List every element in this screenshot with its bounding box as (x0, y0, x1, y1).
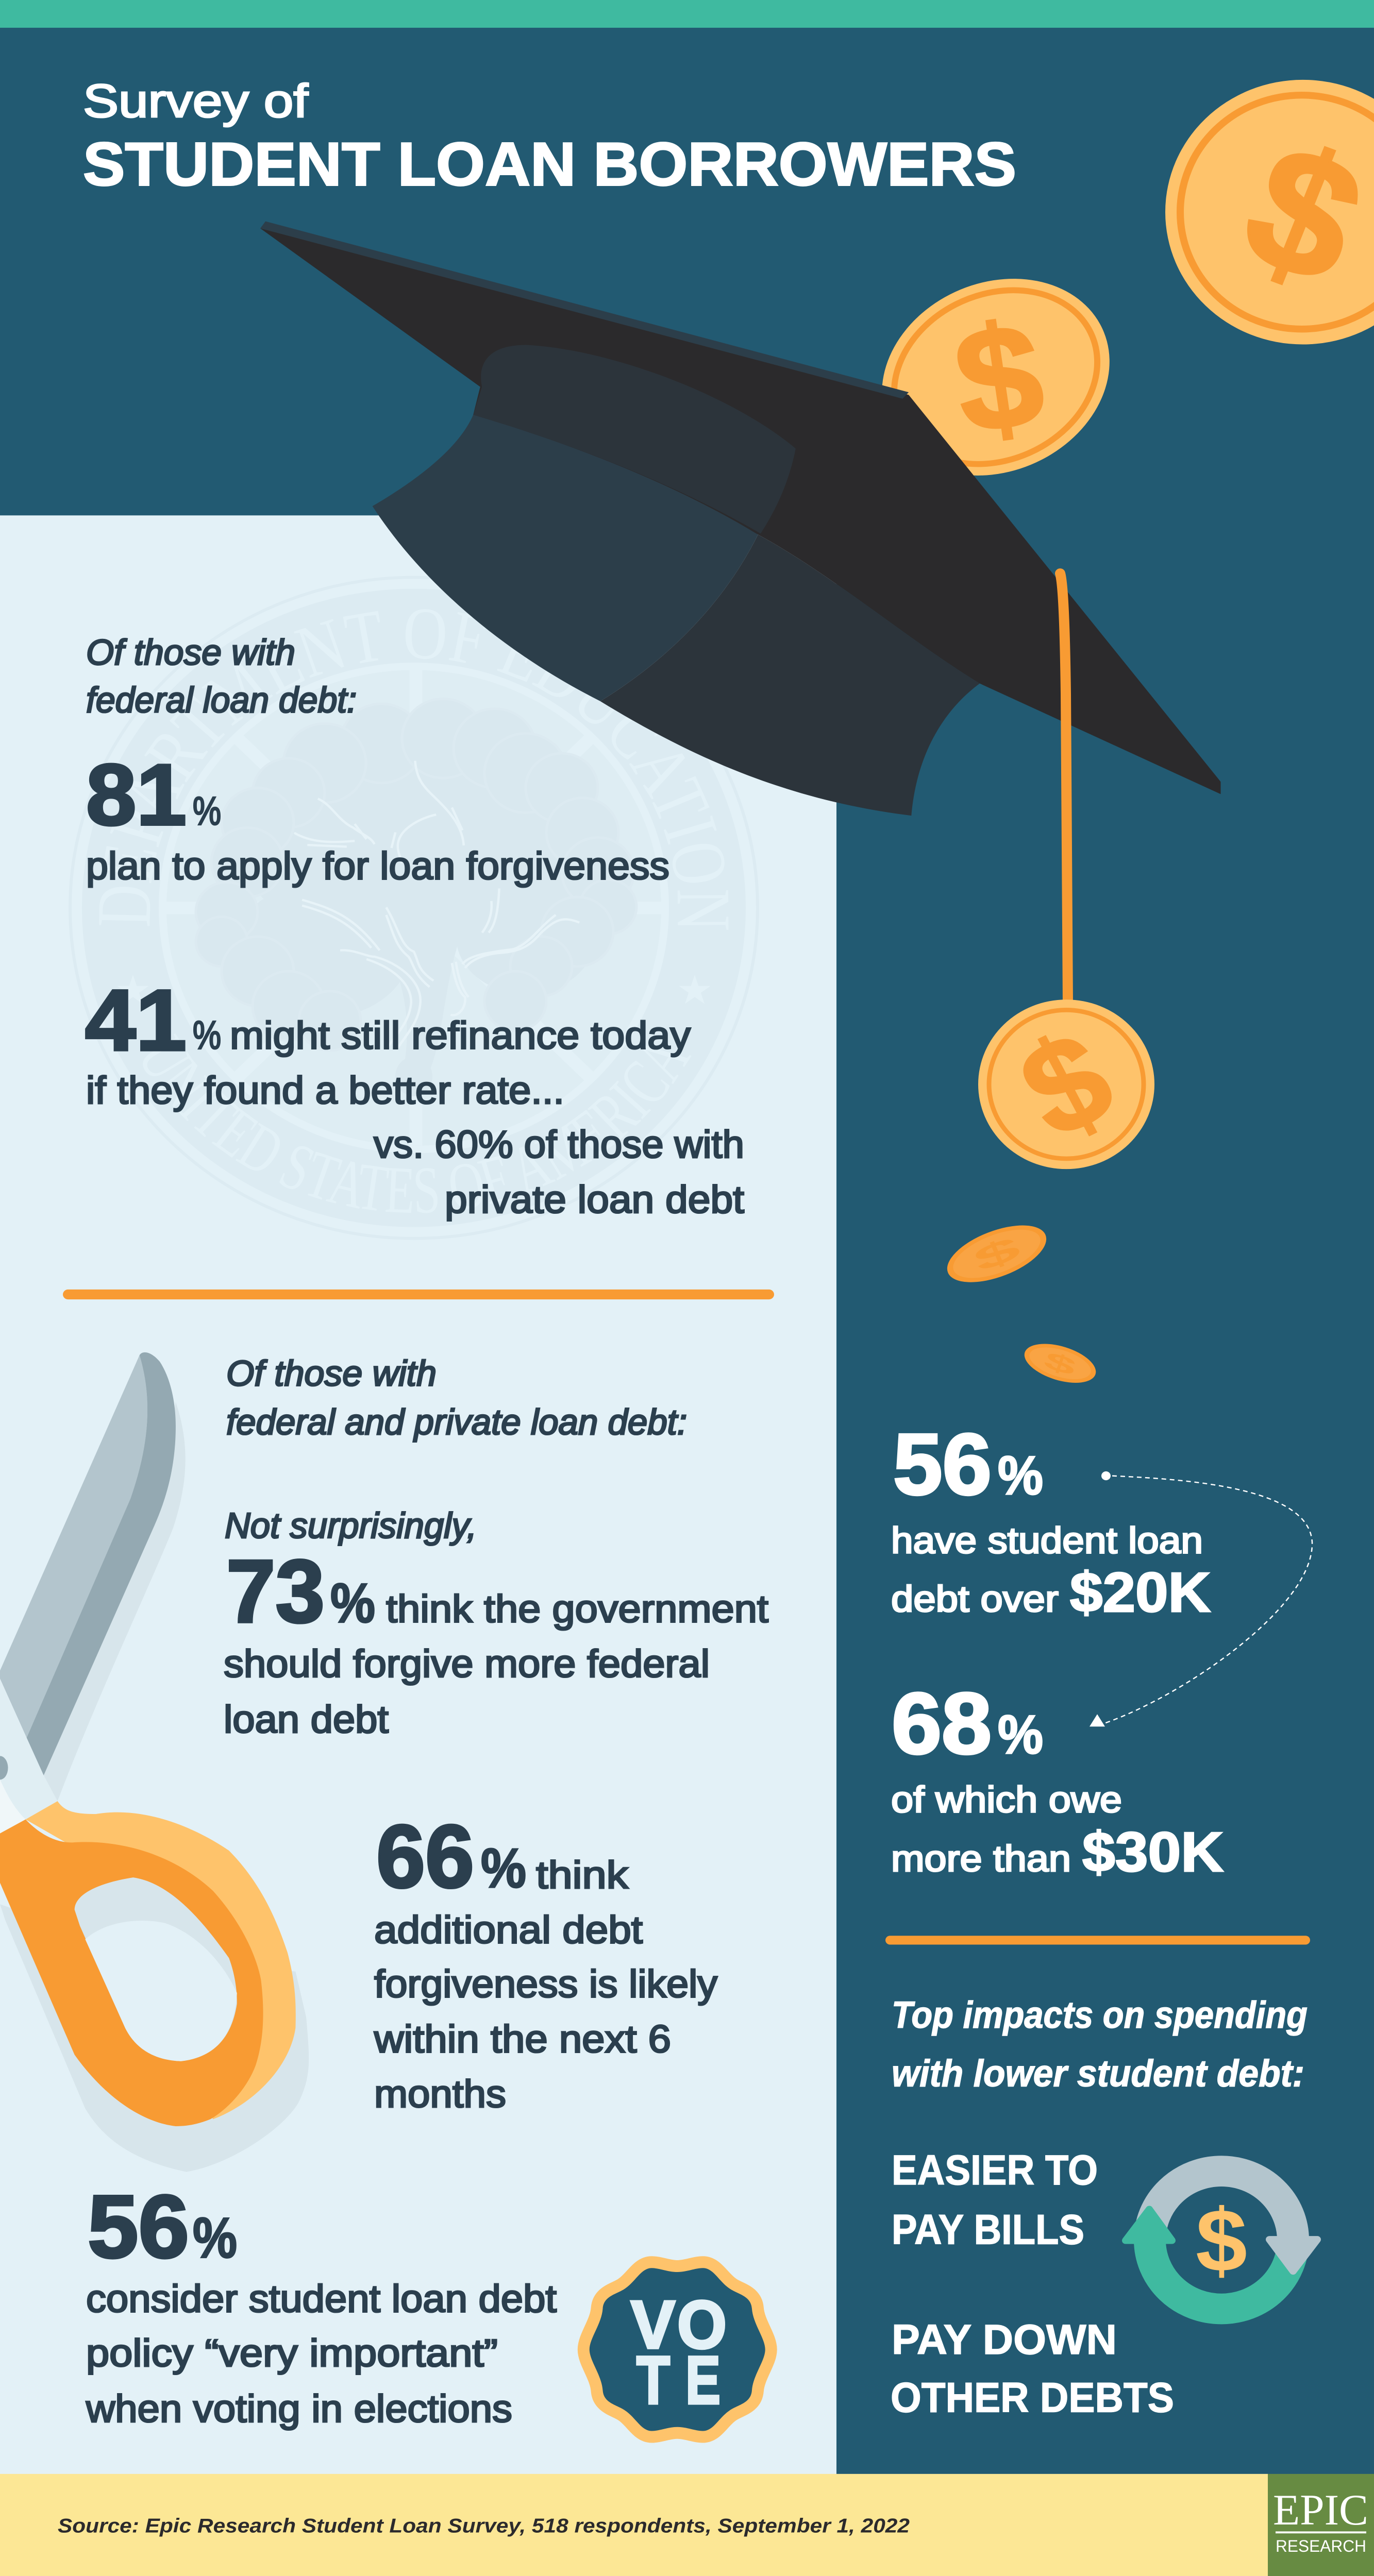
text block: federal and private heading (226, 1353, 687, 1442)
stat: 66% think more forgiveness likely: 66 (376, 1807, 474, 1906)
stat: 73% think government should forgive: 73 (226, 1541, 325, 1641)
stat: 66% think more forgiveness likely: % (481, 1838, 526, 1899)
stat: 41% might refinance: private loan debt (445, 1178, 744, 1221)
text block: easier to pay bills (892, 2147, 1098, 2253)
icon: VOTE badge: E (685, 2343, 720, 2418)
stat: 56% have debt over $20K: 56 (893, 1416, 992, 1513)
stat: 73% think government should forgive: Not surprisingly, (225, 1505, 477, 1546)
stat: 41% might refinance (85, 972, 744, 1221)
footer band (0, 2474, 1268, 2576)
text block: federal loan debt heading: Of those with (86, 632, 295, 672)
stat: 56% have debt over $20K: debt over (891, 1579, 1059, 1620)
stat: 56% very important when voting (86, 2177, 557, 2431)
icon: scissors (0, 1352, 309, 2172)
icon: coin behind cap (846, 241, 1146, 513)
stat: 41% might refinance: % (193, 1013, 221, 1057)
stat: 81% plan to apply: plan to apply for loan forgiveness (86, 845, 669, 888)
stat: 56% have debt over $20K: $20K (1070, 1562, 1211, 1624)
stat: 81% plan to apply: 81 (86, 747, 187, 843)
stat: 73% think government should forgive: % (330, 1572, 375, 1634)
icon: large coin top right (1165, 80, 1374, 345)
icon: VOTE badge: O (677, 2287, 727, 2363)
watermark: Department of Education seal: UNITED STATES OF AMERICA (123, 1024, 705, 1228)
text block: federal and private heading: Of those with (226, 1353, 437, 1393)
text block: pay down other debts: PAY DOWN (892, 2316, 1117, 2363)
stat: 41% might refinance: if they found a better rate... (86, 1070, 564, 1112)
stat: 66% think more forgiveness likely: within the next 6 (374, 2018, 671, 2061)
stat: 66% think more forgiveness likely: months (374, 2073, 506, 2116)
stat: 56% very important when voting: consider student loan debt (86, 2278, 557, 2320)
stat: 81% plan to apply: % (193, 789, 221, 833)
icon: money cycle arrows (1126, 2171, 1317, 2309)
stat: 68% owe more than $30K: $30K (1082, 1821, 1224, 1884)
stat: 73% think government should forgive: loan debt (224, 1698, 389, 1741)
stat: 56% very important when voting: when voting in elections (86, 2387, 512, 2431)
logo: Epic Research (1268, 2474, 1374, 2576)
stat: 68% owe more than $30K: of which owe (891, 1780, 1122, 1820)
icon: falling coin 1 (939, 1214, 1054, 1294)
stat: 41% might refinance: vs. 60% of those with (374, 1123, 744, 1166)
icon: VOTE badge (590, 2268, 765, 2431)
text block: federal and private heading: federal and private loan debt: (226, 1402, 687, 1442)
icon: falling coin 2 (1019, 1336, 1101, 1391)
top teal bar (0, 0, 1374, 28)
icon: graduation cap (260, 222, 1221, 1004)
stat: 66% think more forgiveness likely: additional debt (374, 1909, 643, 1952)
text block: top impacts heading: Top impacts on spending (892, 1994, 1308, 2036)
icon: VOTE badge: V (631, 2287, 675, 2363)
text block: easier to pay bills: EASIER TO (892, 2147, 1098, 2194)
watermark: Department of Education seal (114, 700, 713, 1096)
stat: 41% might refinance: might still refinance today (230, 1014, 691, 1057)
text block: pay down other debts: OTHER DEBTS (891, 2374, 1174, 2421)
watermark: Department of Education seal: DEPARTMENT OF EDUCATION (81, 591, 747, 931)
stat: 68% owe more than $30K: more than (891, 1838, 1071, 1879)
stat: 56% very important when voting: policy “very important” (86, 2332, 498, 2375)
stat: 73% think government should forgive: should forgive more federal (224, 1642, 710, 1686)
icon: falling coin 2: $ (1041, 1346, 1080, 1381)
stat: 68% owe more than $30K: % (998, 1704, 1043, 1765)
stat: 81% plan to apply (86, 747, 669, 888)
stat: 56% very important when voting: 56 (88, 2177, 189, 2277)
source note: Source: Epic Research Student Loan Survey, 518 respondents, September 1, 2022 (58, 2515, 910, 2537)
icon: money cycle arrows: $ (1196, 2191, 1247, 2291)
stat: 56% very important when voting: % (193, 2206, 237, 2269)
stat: 56% have debt over $20K: % (998, 1445, 1043, 1506)
title: STUDENT LOAN BORROWERS (83, 130, 1016, 198)
title: Survey of (83, 75, 309, 127)
stat: 73% think government should forgive: think the government (386, 1588, 768, 1631)
icon: coin hanging from tassel: $ (998, 1003, 1135, 1167)
watermark: Department of Education seal: ★ (676, 967, 713, 1013)
arrow: dashed curve from 56% to 68% (1090, 1471, 1312, 1726)
stat: 56% have debt over $20K: have student loan (891, 1520, 1203, 1561)
stat: 68% owe more than $30K (891, 1675, 1224, 1884)
watermark: Department of Education seal: ★ (114, 967, 152, 1013)
stat: 66% think more forgiveness likely (374, 1807, 718, 2116)
stat: 68% owe more than $30K: 68 (892, 1675, 992, 1772)
stat: 73% think government should forgive (224, 1505, 768, 1741)
icon: falling coin 1: $ (968, 1228, 1026, 1279)
text block: top impacts heading: with lower student debt: (892, 2053, 1304, 2094)
logo: Epic Research: RESEARCH (1276, 2537, 1366, 2556)
logo: Epic Research: EPIC (1273, 2485, 1368, 2534)
divider right (885, 1936, 1310, 1945)
text block: federal loan debt heading (86, 632, 357, 720)
stat: 56% have debt over $20K (891, 1416, 1211, 1624)
text block: pay down other debts (891, 2316, 1174, 2421)
panel: light left column (0, 515, 836, 2475)
icon: coin behind cap: $ (945, 292, 1052, 465)
text block: federal loan debt heading: federal loan debt: (86, 680, 357, 720)
title (83, 75, 1016, 198)
text block: easier to pay bills: PAY BILLS (892, 2206, 1084, 2253)
stat: 66% think more forgiveness likely: forgiveness is likely (374, 1963, 718, 2006)
text block: top impacts heading (892, 1994, 1308, 2094)
divider left (63, 1290, 774, 1299)
icon: VOTE badge: T (636, 2343, 670, 2418)
stat: 66% think more forgiveness likely: think (536, 1854, 629, 1897)
stat: 41% might refinance: 41 (85, 972, 187, 1069)
